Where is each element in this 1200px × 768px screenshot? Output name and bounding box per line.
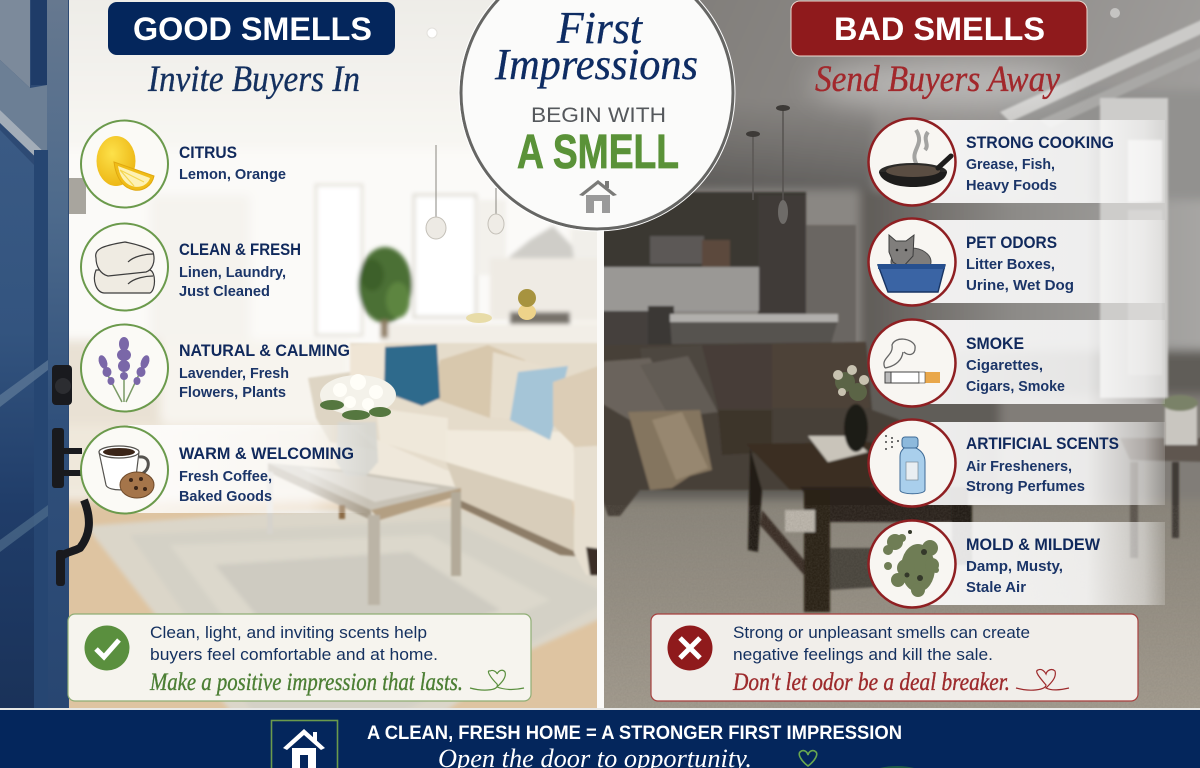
- item: warm and welcoming: [81, 426, 354, 514]
- heading: good smells: [108, 2, 395, 55]
- icon: cat in litter box: [878, 235, 945, 292]
- item: mold and mildew: Damp, Musty,: [966, 559, 1063, 575]
- item: artificial scents: Air Fresheners,: [966, 459, 1072, 475]
- item: pet odors: PET ODORS: [966, 234, 1057, 252]
- item: natural and calming: Flowers, Plants: [179, 385, 286, 401]
- item: smoke: [868, 320, 1165, 406]
- item: strong cooking: Grease, Fish,: [966, 157, 1055, 173]
- open blue front door: [0, 0, 89, 709]
- item: natural and calming: NATURAL & CALMING: [179, 342, 350, 360]
- item: natural and calming: [81, 324, 350, 412]
- icon: spray bottle: [885, 435, 925, 494]
- callout: good smells message: Clean, light, and inviting scents help: [150, 624, 427, 642]
- icon: check mark: [84, 626, 130, 670]
- white divider between rooms: [597, 0, 604, 710]
- item: citrus: [81, 120, 286, 208]
- icon: x mark: [668, 626, 712, 670]
- callout: good smells message: Make a positive impression that lasts.: [149, 669, 463, 696]
- callout: bad smells message: [651, 614, 1138, 701]
- heading: bad smells: [791, 1, 1087, 56]
- item: citrus: CITRUS: [179, 144, 237, 162]
- item: smoke: Cigarettes,: [966, 358, 1043, 374]
- item: clean and fresh: Just Cleaned: [179, 284, 270, 300]
- title badge: first impressions begin with a smell: A SMELL: [517, 126, 679, 179]
- title badge: first impressions begin with a smell: BEGIN WITH: [531, 104, 666, 127]
- item: pet odors: Urine, Wet Dog: [966, 278, 1074, 294]
- item: mold and mildew: MOLD & MILDEW: [966, 536, 1100, 554]
- panel: good smells: [68, 2, 531, 701]
- panel: bad smells: [651, 1, 1165, 701]
- heading: bad smells: BAD SMELLS: [834, 11, 1045, 47]
- heading: good smells: GOOD SMELLS: [133, 11, 372, 47]
- item: clean and fresh: CLEAN & FRESH: [179, 241, 301, 259]
- icon: lemon: [96, 136, 154, 190]
- item: artificial scents: ARTIFICIAL SCENTS: [966, 435, 1119, 453]
- icon: gray house: [579, 180, 617, 213]
- item: mold and mildew: Stale Air: [966, 580, 1026, 596]
- footer banner: A CLEAN, FRESH HOME = A STRONGER FIRST IMPRESSION: [367, 723, 902, 744]
- subheading: send buyers away: Send Buyers Away: [815, 59, 1061, 100]
- item: strong cooking: Heavy Foods: [966, 178, 1057, 194]
- item: smoke: Cigars, Smoke: [966, 379, 1065, 395]
- icon: mold patches: [883, 530, 939, 597]
- item: pet odors: [868, 218, 1165, 306]
- footer banner: [0, 708, 1200, 768]
- icon: lavender: [97, 337, 151, 402]
- item: warm and welcoming: Fresh Coffee,: [179, 469, 272, 485]
- item: strong cooking: [868, 118, 1165, 206]
- callout: bad smells message: negative feelings and kill the sale.: [733, 646, 993, 664]
- icon: heart flourish: [1016, 669, 1069, 690]
- item: clean and fresh: [81, 224, 301, 310]
- item: natural and calming: Lavender, Fresh: [179, 366, 289, 382]
- item: clean and fresh: Linen, Laundry,: [179, 265, 286, 281]
- callout: bad smells message: Strong or unpleasant smells can create: [733, 624, 1030, 642]
- icon: cigarette: [884, 339, 940, 383]
- icon: green heart: [799, 751, 817, 766]
- item: warm and welcoming: WARM & WELCOMING: [179, 445, 354, 463]
- item: artificial scents: Strong Perfumes: [966, 479, 1085, 495]
- item: warm text backing panel: [128, 425, 368, 513]
- icon: coffee and cookie: [99, 446, 154, 498]
- title badge: first impressions begin with a smell: Impressions: [494, 40, 698, 89]
- callout: good smells message: buyers feel comfortable and at home.: [150, 646, 438, 664]
- callout: bad smells message: Don't let odor be a deal breaker.: [732, 669, 1010, 696]
- item: pet odors: Litter Boxes,: [966, 257, 1055, 273]
- item: warm and welcoming: Baked Goods: [179, 489, 272, 505]
- item: mold and mildew: [868, 520, 1165, 608]
- door handle: [52, 365, 89, 586]
- icon: heart flourish: [470, 670, 524, 690]
- item: artificial scents: [868, 420, 1165, 506]
- callout: good smells message: [68, 614, 531, 701]
- title badge: first impressions begin with a smell: [459, 0, 735, 231]
- right room photo: dim living room: [570, 0, 1200, 740]
- icon: house badge: [272, 720, 338, 768]
- item: strong cooking: STRONG COOKING: [966, 134, 1114, 152]
- icon: folded towels: [94, 242, 154, 293]
- title badge: first impressions begin with a smell: First: [556, 2, 643, 53]
- subheading: invite buyers in: Invite Buyers In: [147, 59, 360, 100]
- left room photo: bright living room: [69, 0, 597, 708]
- item: citrus: Lemon, Orange: [179, 167, 286, 183]
- icon: smoking pan: [879, 130, 951, 187]
- item: smoke: SMOKE: [966, 335, 1024, 353]
- decorative green dome: [880, 766, 914, 768]
